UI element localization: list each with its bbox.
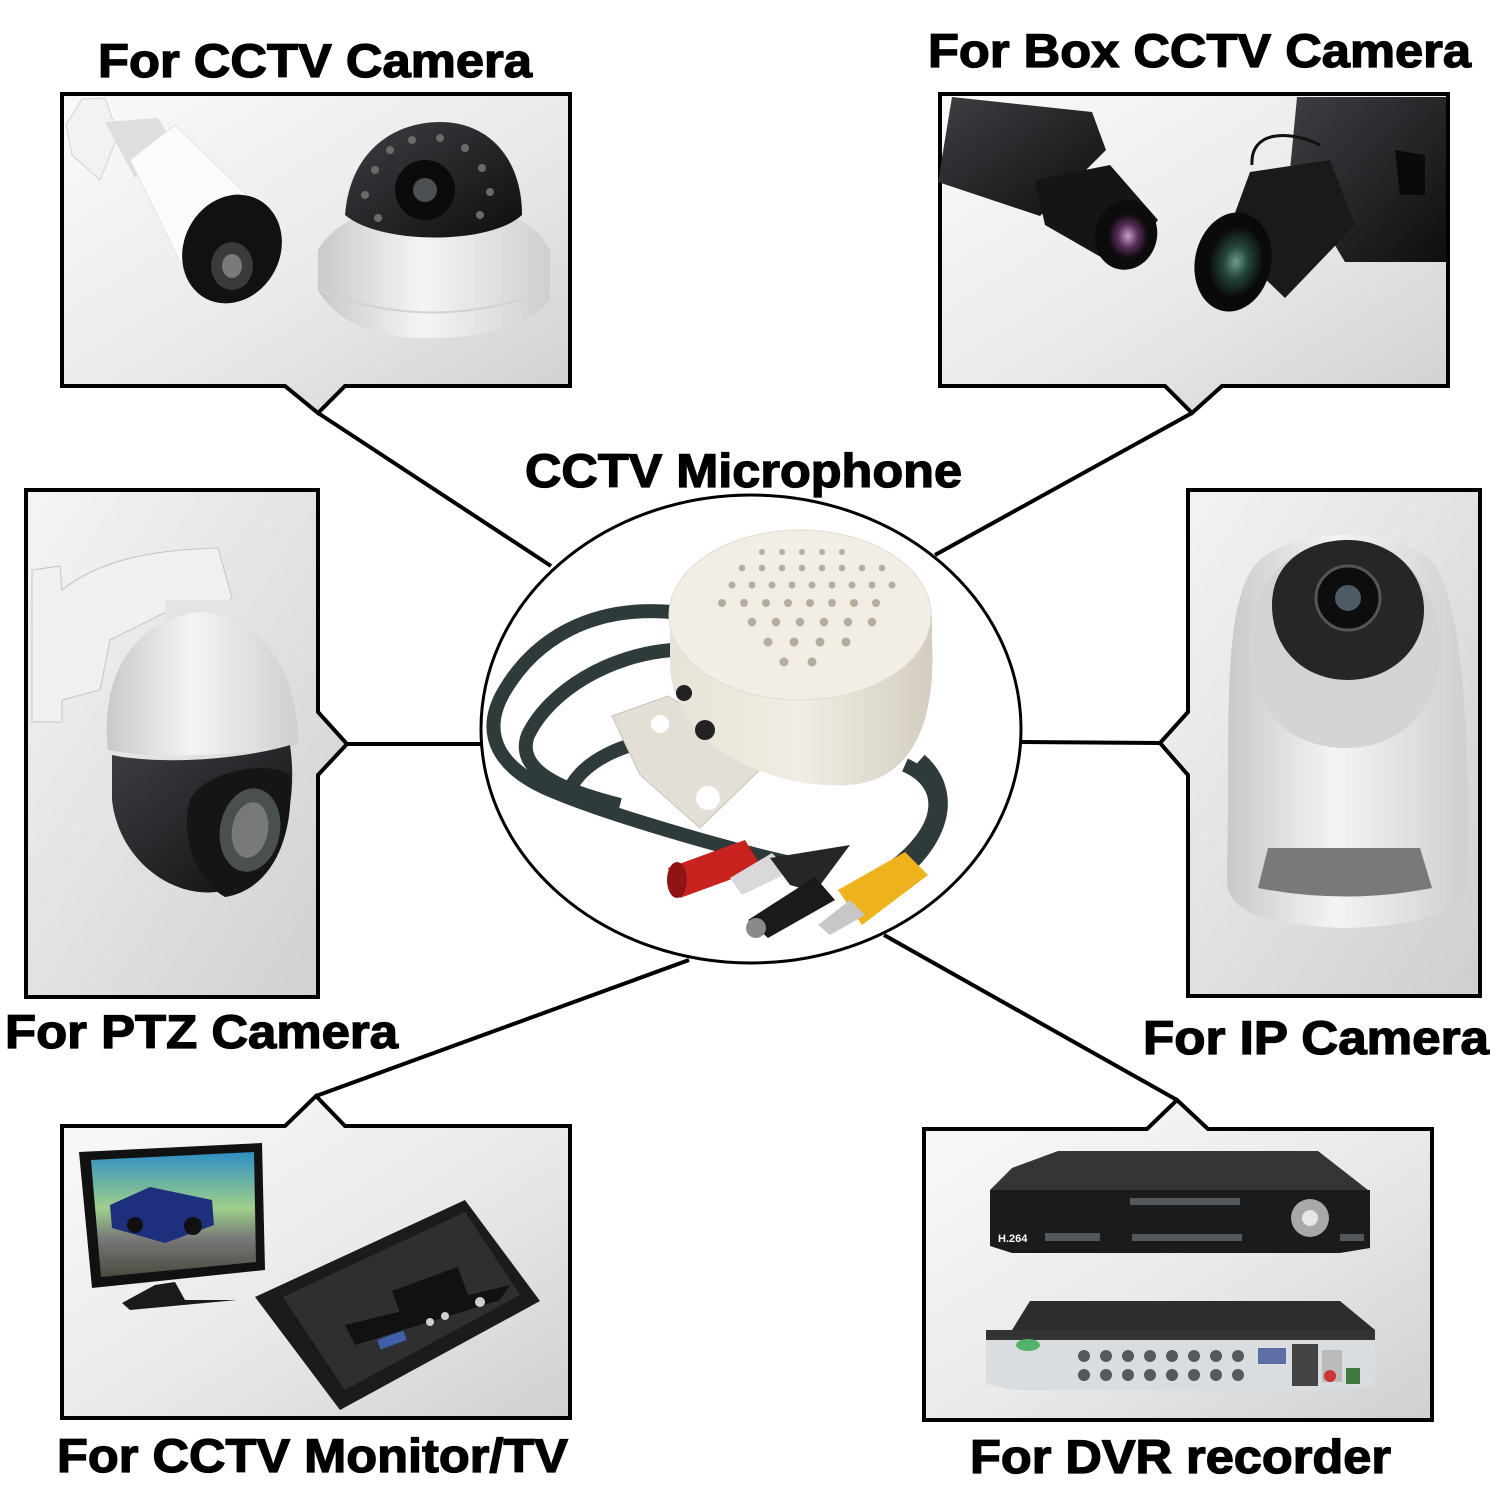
heading: CCTV Camera: For CCTV Camera [98,34,533,87]
icon: IP camera [1227,535,1468,928]
heading: DVR recorder: For DVR recorder [970,1430,1391,1483]
heading: Box CCTV Camera: For Box CCTV Camera [928,24,1472,77]
panel: central microphone circle [481,495,1021,963]
icon: PTZ dome camera [32,548,298,897]
icon: bullet camera [66,98,301,321]
icon: microphone housing [669,530,932,785]
icon: box camera left [938,97,1165,277]
heading: IP Camera: For IP Camera [1143,1011,1490,1064]
icon: cables [493,611,941,905]
icon: DVR front [990,1151,1370,1253]
icon: connectors [667,840,928,938]
icon: box camera right [1185,97,1446,319]
heading: CCTV Microphone: CCTV Microphone [525,444,962,497]
connector lines [316,413,1192,1100]
panel: box camera [938,94,1448,413]
heading: CCTV Monitor/TV: For CCTV Monitor/TV [57,1429,569,1482]
heading: PTZ Camera: For PTZ Camera [5,1005,399,1058]
icon: dome camera [318,122,550,338]
panel: DVR [924,1100,1432,1420]
icon: DVR front: H.264 [998,1233,1028,1245]
panel: monitor [62,1096,570,1418]
panel: PTZ camera [26,490,347,997]
panel: CCTV camera [62,94,570,413]
icon: monitor back [255,1200,540,1410]
icon: DVR back [986,1301,1375,1390]
icon: monitor front [79,1143,265,1310]
panel: IP camera [1160,490,1480,996]
icon: mounting bracket [612,696,770,828]
